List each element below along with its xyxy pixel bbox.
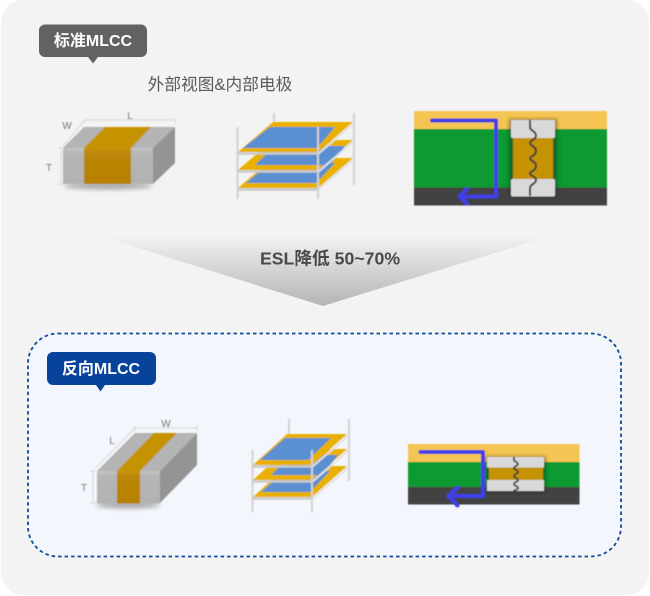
label: ESL reduced 50~70%: ESL降低 50~70% xyxy=(260,248,400,268)
icon: standard MLCC chip: L xyxy=(127,111,133,122)
diagram: reverse MLCC mounted on board xyxy=(408,444,580,506)
icon: reverse MLCC internal electrode layers xyxy=(252,419,349,512)
icon: reverse MLCC chip: W xyxy=(161,419,171,430)
icon: standard MLCC chip xyxy=(46,111,175,190)
icon: standard MLCC chip: W xyxy=(62,121,72,132)
icon: reverse MLCC chip xyxy=(81,419,197,508)
badge: standard MLCC: 标准MLCC xyxy=(54,32,133,50)
panel: reverse MLCC xyxy=(28,334,621,556)
icon: standard MLCC chip: T xyxy=(46,163,52,174)
arrow: ESL reduction xyxy=(97,235,553,306)
heading: external view and internal electrodes: 外部视图&内部电极 xyxy=(148,75,293,94)
diagram: standard MLCC mounted on board xyxy=(414,111,607,206)
icon: standard MLCC internal electrode layers xyxy=(238,113,354,199)
badge: reverse MLCC xyxy=(47,352,156,392)
icon: reverse MLCC chip: L xyxy=(109,436,115,447)
badge: reverse MLCC: 反向MLCC xyxy=(62,360,141,378)
badge: standard MLCC xyxy=(39,24,147,64)
icon: reverse MLCC chip: T xyxy=(81,483,87,494)
